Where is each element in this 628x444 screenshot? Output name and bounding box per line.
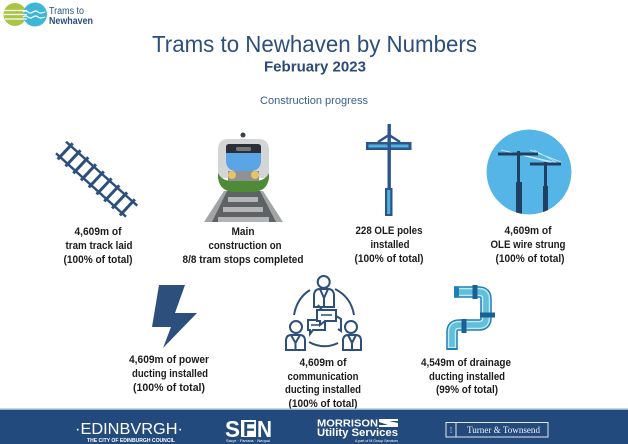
logo: City of Edinburgh Council: ·EDINBVRGH· — [75, 421, 183, 438]
caption: (100% of total) — [354, 253, 424, 265]
logo: Trams to Newhaven — [4, 2, 93, 27]
caption: 4,549m of drainage — [421, 357, 511, 369]
caption: ducting installed — [285, 384, 361, 396]
caption: communication — [288, 371, 359, 383]
caption: installed — [370, 239, 410, 251]
logo: Morrison Utility Services: A part of M Group Services — [355, 439, 398, 443]
stat: tram track — [56, 142, 137, 266]
logo: SFN: N — [257, 416, 272, 442]
icon: tram on rails — [204, 132, 283, 222]
caption: OLE wire strung — [490, 239, 566, 251]
logo: SFN — [225, 416, 272, 443]
caption: (99% of total) — [436, 384, 498, 396]
caption: (100% of total) — [496, 253, 565, 265]
logo: SFN: S — [225, 416, 240, 442]
caption: ducting installed — [132, 368, 208, 380]
logo: Turner & Townsend: ⁞ — [450, 426, 452, 435]
stat: OLE poles — [354, 124, 424, 265]
caption: (100% of total) — [133, 382, 205, 394]
caption: 4,609m of — [504, 225, 552, 237]
logo: Trams to Newhaven: Newhaven — [49, 16, 93, 27]
logo: Turner & Townsend: Turner & Townsend — [467, 425, 541, 435]
title: Trams to Newhaven by Numbers — [152, 31, 477, 57]
caption: 4,609m of — [300, 357, 347, 369]
icon: overhead wires in circle — [486, 130, 572, 216]
icon: railway track — [56, 142, 137, 217]
caption: 8/8 tram stops completed — [182, 254, 304, 266]
caption: 228 OLE poles — [356, 225, 422, 237]
logo: SFN: F — [243, 419, 255, 441]
caption: (100% of total) — [288, 398, 358, 410]
icon: lightning bolt — [152, 285, 197, 348]
icon: OLE pole — [366, 124, 412, 216]
caption: ducting installed — [429, 371, 505, 383]
subtitle: date: February 2023 — [264, 60, 366, 76]
caption: tram track laid — [66, 240, 132, 252]
icon: pipes — [452, 285, 495, 350]
stat: tram stops — [182, 132, 304, 266]
footer band — [0, 408, 628, 444]
logo: Morrison Utility Services — [317, 418, 398, 443]
caption: Main — [232, 226, 255, 238]
logo: Morrison Utility Services: Utility Services — [317, 427, 398, 439]
caption: 4,609m of power — [129, 354, 210, 366]
icon: people talking — [286, 276, 361, 350]
logo: City of Edinburgh Council: THE CITY OF EDINBURGH COUNCIL — [87, 438, 175, 444]
logo: Morrison Utility Services: MORRISON — [317, 418, 378, 430]
caption: construction on — [208, 240, 282, 252]
logo: Turner & Townsend — [446, 422, 548, 437]
logo: SFN: Sacyr · Farrans · Neopul — [226, 438, 270, 443]
stat: OLE wire — [486, 130, 572, 265]
caption: 4,609m of — [74, 226, 122, 238]
section heading: Construction progress — [260, 95, 368, 107]
stat: power ducting — [129, 285, 210, 394]
stat: communication ducting — [285, 276, 361, 410]
stat: drainage ducting — [421, 285, 511, 396]
caption: (100% of total) — [64, 254, 133, 266]
logo: Trams to Newhaven: Trams to — [49, 6, 84, 17]
